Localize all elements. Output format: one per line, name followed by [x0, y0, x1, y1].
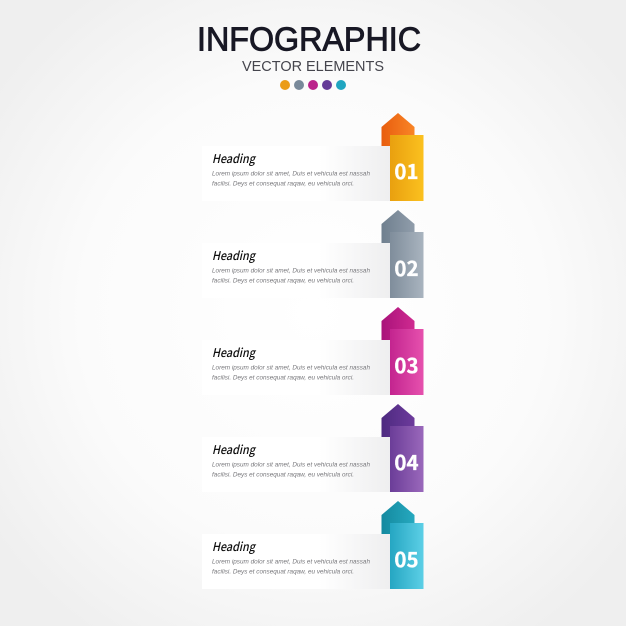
- text card 05: [202, 534, 391, 589]
- number 05: 05: [394, 543, 419, 573]
- text card 03: [202, 340, 391, 395]
- text card 01: [202, 146, 391, 201]
- body text 01: Lorem ipsum dolor sit amet, Duis et vehicula est nassah: [212, 170, 370, 178]
- colour dots: [280, 80, 346, 90]
- number tab 02: [390, 232, 424, 298]
- body text 02: Lorem ipsum dolor sit amet, Duis et vehicula est nassah: [212, 268, 370, 274]
- text card 04: [202, 437, 391, 492]
- text card 02: [202, 243, 391, 298]
- title: INFOGRAPHIC: [197, 20, 421, 58]
- step 04: [202, 404, 424, 492]
- number 02: 02: [394, 252, 419, 282]
- arrow head 05: [382, 501, 414, 534]
- arrow head 01: [382, 113, 414, 146]
- step 05: [202, 501, 424, 589]
- arrow head 04: [382, 404, 414, 437]
- heading 02: Heading: [212, 247, 257, 264]
- number tab 04: [390, 426, 424, 492]
- number 04: 04: [394, 446, 419, 476]
- subtitle: VECTOR ELEMENTS: [242, 58, 384, 75]
- arrow head 02: [382, 210, 414, 243]
- body text 04: facilisi. Deys et consequat raqaw, eu vehicula orci.: [212, 472, 354, 478]
- step 02: [202, 210, 424, 298]
- body text 02: facilisi. Deys et consequat raqaw, eu vehicula orci.: [212, 278, 354, 284]
- body text 05: Lorem ipsum dolor sit amet, Duis et vehicula est nassah: [212, 558, 370, 566]
- number tab 01: [390, 135, 424, 201]
- body text 03: Lorem ipsum dolor sit amet, Duis et vehicula est nassah: [212, 364, 370, 372]
- number tab 05: [390, 523, 424, 589]
- body text 05: facilisi. Deys et consequat raqaw, eu vehicula orci.: [212, 568, 354, 576]
- step 01: [202, 113, 424, 201]
- heading 01: Heading: [212, 150, 257, 167]
- number 01: 01: [394, 155, 419, 185]
- number 03: 03: [394, 349, 419, 379]
- body text 01: facilisi. Deys et consequat raqaw, eu vehicula orci.: [212, 180, 354, 188]
- number tab 03: [390, 329, 424, 395]
- heading 04: Heading: [212, 441, 257, 458]
- heading 05: Heading: [212, 538, 257, 555]
- heading 03: Heading: [212, 344, 257, 361]
- arrow head 03: [382, 307, 414, 340]
- body text 04: Lorem ipsum dolor sit amet, Duis et vehicula est nassah: [212, 462, 370, 468]
- step 03: [202, 307, 424, 395]
- body text 03: facilisi. Deys et consequat raqaw, eu vehicula orci.: [212, 374, 354, 382]
